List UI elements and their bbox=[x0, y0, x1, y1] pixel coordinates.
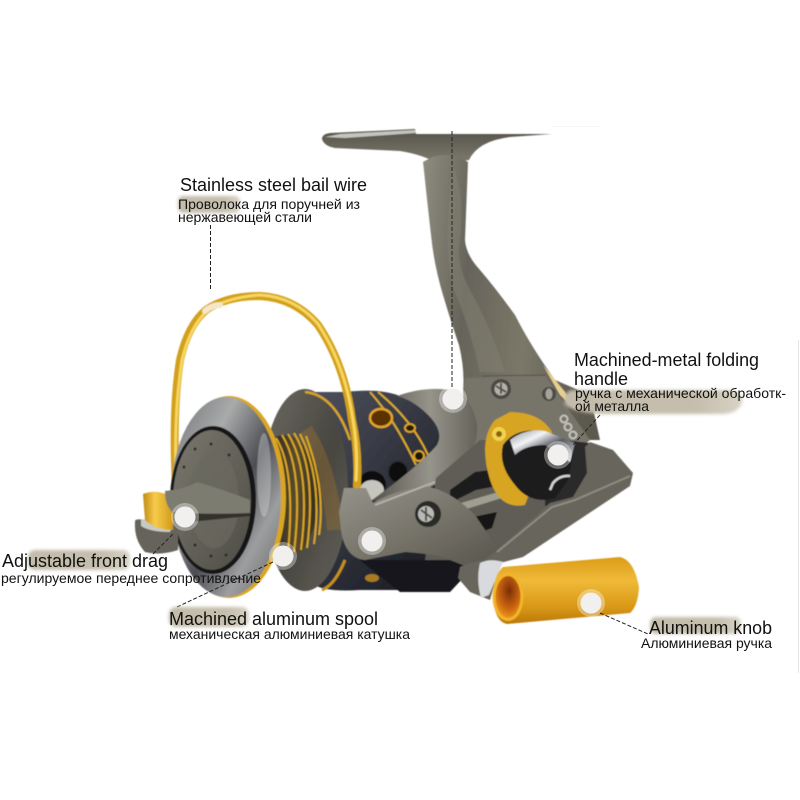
callout marker dots bbox=[171, 385, 605, 617]
label: stainless steel bail wire: Проволока для поручней из bbox=[178, 196, 360, 212]
frame screws bbox=[491, 379, 576, 438]
chrome shaft bbox=[502, 430, 575, 500]
reel illustration bbox=[135, 129, 639, 624]
label: adjustable front drag: Adjustable front drag bbox=[2, 551, 168, 571]
bail arm bbox=[339, 482, 500, 568]
aluminum handle knob bbox=[492, 557, 639, 624]
label: machined-metal folding handle: handle bbox=[574, 369, 628, 389]
label: stainless steel bail wire: Stainless steel bail wire bbox=[180, 175, 367, 195]
label: machined-metal folding handle: ой металла bbox=[575, 398, 649, 414]
label: adjustable front drag bbox=[1, 550, 261, 586]
label: machined aluminum spool bbox=[169, 607, 410, 642]
label: aluminum knob bbox=[641, 617, 772, 651]
dashed leader lines bbox=[153, 131, 648, 634]
rotor arch bbox=[372, 389, 477, 505]
label: machined-metal folding handle: Machined-metal folding bbox=[574, 350, 759, 370]
handle collar ring bbox=[478, 560, 503, 598]
gold drive gear disc bbox=[485, 412, 552, 506]
label: stainless steel bail wire bbox=[178, 175, 367, 225]
drag knob bbox=[135, 482, 250, 554]
line spool arbor with gold rings bbox=[273, 433, 321, 555]
label: machined aluminum spool: Machined aluminum spool bbox=[169, 609, 378, 629]
bail wire bbox=[175, 295, 357, 488]
handle arm bbox=[458, 438, 633, 600]
stem and body frame bbox=[423, 155, 600, 480]
rod foot bbox=[322, 129, 552, 165]
page edge lines bbox=[552, 126, 798, 673]
label: machined aluminum spool: механическая алюминиевая катушка bbox=[169, 626, 410, 642]
front spool flange bbox=[170, 396, 286, 598]
label: machined-metal folding handle: ручка с механической обработк- bbox=[575, 385, 786, 401]
label: aluminum knob: Алюминиевая ручка bbox=[641, 635, 772, 651]
label: machined-metal folding handle bbox=[565, 350, 786, 414]
label: stainless steel bail wire: нержавеющей стали bbox=[178, 209, 312, 225]
rotor cup bbox=[315, 391, 476, 590]
label: aluminum knob: Aluminum knob bbox=[649, 618, 772, 638]
rear spool flange bbox=[262, 389, 350, 591]
side panels with dark windows bbox=[360, 440, 560, 592]
label: adjustable front drag: регулируемое переднее сопротивление bbox=[1, 570, 261, 586]
